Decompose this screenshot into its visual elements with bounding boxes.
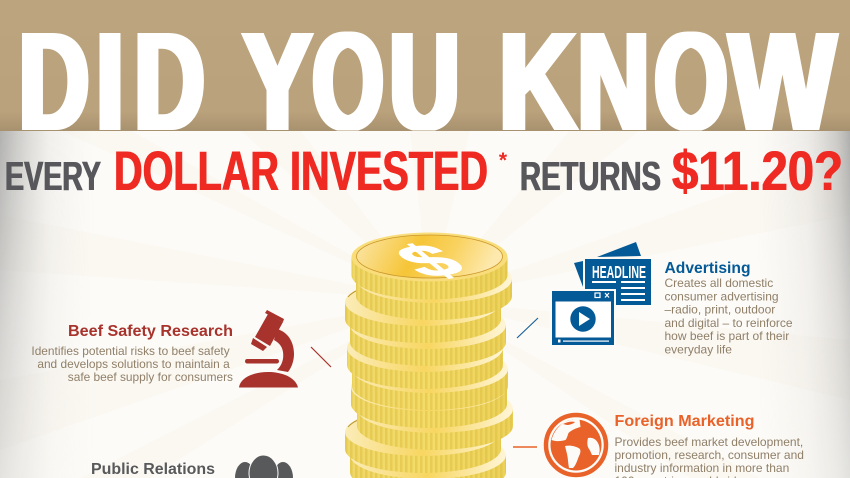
title: DID YOU KNOW: I bbox=[96, 2, 124, 160]
panel: public relations bbox=[91, 455, 293, 478]
subheading: every dollar invested returns $11.20: EVERY bbox=[5, 153, 101, 199]
icon: people bbox=[235, 455, 293, 478]
subheading: every dollar invested returns $11.20: RETURNS bbox=[520, 153, 661, 199]
title: DID YOU KNOW: D bbox=[19, 2, 89, 160]
text: beef safety description: and develops solutions to maintain a bbox=[37, 357, 230, 371]
title: DID YOU KNOW: U bbox=[390, 2, 460, 160]
title: DID YOU KNOW: N bbox=[578, 2, 650, 160]
coin 10 bbox=[350, 431, 506, 478]
coin 4 bbox=[350, 301, 506, 366]
coin 9 bbox=[345, 408, 501, 473]
heading: foreign marketing: Foreign Marketing bbox=[614, 413, 754, 430]
title: DID YOU KNOW: O bbox=[654, 2, 728, 160]
text: foreign marketing description: promotion, research, consumer and bbox=[614, 448, 804, 462]
panel: advertising bbox=[551, 242, 796, 356]
icon: globe bbox=[546, 415, 606, 475]
text: advertising description: and digital – to reinforce bbox=[664, 316, 793, 330]
text: advertising description: how beef is part of their bbox=[664, 329, 789, 343]
text: advertising description: consumer advertising bbox=[664, 289, 779, 303]
title: DID YOU KNOW: K bbox=[499, 2, 577, 160]
sunburst rays bbox=[0, 130, 850, 478]
coin 3 bbox=[345, 278, 501, 343]
dollar sign: $ bbox=[379, 234, 480, 287]
coin 7 bbox=[351, 363, 507, 428]
top tan band bbox=[0, 0, 850, 131]
connector: advertising bbox=[517, 318, 538, 338]
panel: foreign marketing bbox=[546, 413, 807, 478]
heading: beef safety research: Beef Safety Research bbox=[68, 323, 233, 340]
coin 6 bbox=[352, 345, 508, 410]
coin 2 bbox=[356, 255, 512, 320]
text: foreign marketing description: industry information in more than bbox=[614, 461, 789, 475]
connector: foreign marketing bbox=[513, 446, 537, 448]
title: DID YOU KNOW: D bbox=[134, 2, 204, 160]
subheading: every dollar invested returns $11.20: * bbox=[499, 149, 508, 172]
coin 1 top with dollar sign bbox=[352, 232, 508, 300]
subheading: every dollar invested returns $11.20: DOLLAR INVESTED bbox=[114, 139, 488, 202]
text: foreign marketing description: Provides beef market development, bbox=[614, 435, 803, 449]
icon: newspaper and video player bbox=[551, 242, 651, 346]
text: beef safety description: safe beef supply for consumers bbox=[68, 370, 233, 384]
title: DID YOU KNOW bbox=[22, 32, 840, 130]
panel: beef safety research bbox=[31, 310, 298, 388]
text: advertising description: everyday life bbox=[664, 342, 732, 356]
title: DID YOU KNOW: O bbox=[312, 2, 384, 160]
heading: advertising: Advertising bbox=[664, 260, 750, 277]
connector: beef safety bbox=[311, 347, 331, 367]
coin 8 bbox=[357, 385, 513, 450]
text: advertising description: –radio, print, outdoor bbox=[664, 303, 775, 317]
subheading: every dollar invested returns $11.20 bbox=[5, 139, 843, 202]
text: advertising description: Creates all domestic bbox=[664, 276, 773, 290]
coin 5 bbox=[347, 324, 503, 389]
heading: public relations: Public Relations bbox=[91, 461, 215, 478]
title: DID YOU KNOW: Y bbox=[242, 2, 312, 160]
icon: microscope bbox=[239, 310, 298, 388]
coin stack bbox=[345, 232, 513, 478]
icon: newspaper and video player: HEADLINE bbox=[592, 262, 646, 282]
text: beef safety description: Identifies potential risks to beef safety bbox=[31, 344, 230, 358]
page background bbox=[0, 130, 850, 478]
